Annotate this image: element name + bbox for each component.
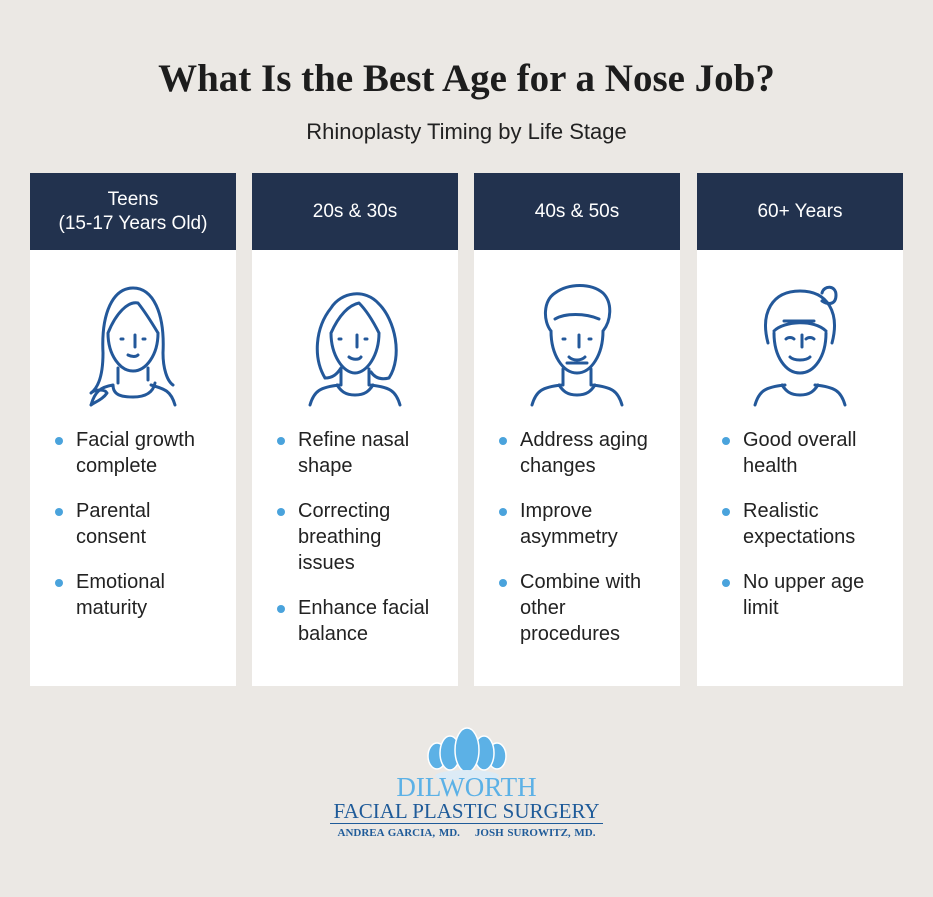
- panel: 20s & 30s: [252, 173, 458, 686]
- panel: teens: Parental consent: [76, 500, 150, 548]
- panel: 60+: 60+ Years: [757, 200, 843, 222]
- panel: 40s & 50s: Address aging changes: [520, 429, 648, 477]
- icon: adult woman face: [308, 292, 402, 406]
- title: What Is the Best Age for a Nose Job?: [158, 57, 775, 100]
- panel: 20s & 30s: Refine nasal shape: [298, 429, 409, 477]
- panel: teens: Facial growth complete: [76, 429, 195, 477]
- logo: DILWORTH: [396, 772, 537, 802]
- panel: 40s & 50s: Improve asymmetry: [520, 500, 618, 548]
- icon: teen face: [89, 286, 176, 407]
- icon: middle-aged face: [530, 284, 624, 406]
- panel: teens: (15-17 Years Old): [59, 212, 207, 234]
- panel: teens: [30, 173, 236, 686]
- panel: 40s & 50s: Combine with other procedures: [520, 571, 641, 645]
- icon: lotus: [427, 727, 507, 780]
- logo: [330, 727, 603, 839]
- panel: 60+: No upper age limit: [743, 571, 864, 619]
- panel: 40s & 50s: 40s & 50s: [535, 200, 619, 222]
- icon: senior face: [754, 286, 846, 406]
- panel: 60+: Good overall health: [743, 429, 856, 477]
- panel: 20s & 30s: Correcting breathing issues: [298, 500, 390, 574]
- panel: teens: Teens: [108, 188, 158, 210]
- logo: ANDREA GARCIA, MD. JOSH SUROWITZ, MD.: [338, 827, 595, 839]
- logo: FACIAL PLASTIC SURGERY: [333, 799, 600, 823]
- panel: 60+: [697, 173, 903, 686]
- panel: 20s & 30s: Enhance facial balance: [298, 597, 429, 645]
- panel: teens: Emotional maturity: [76, 571, 165, 619]
- panel: 20s & 30s: 20s & 30s: [313, 200, 397, 222]
- panel: 40s & 50s: [474, 173, 680, 686]
- panel: 60+: Realistic expectations: [743, 500, 855, 548]
- subtitle: Rhinoplasty Timing by Life Stage: [306, 119, 627, 144]
